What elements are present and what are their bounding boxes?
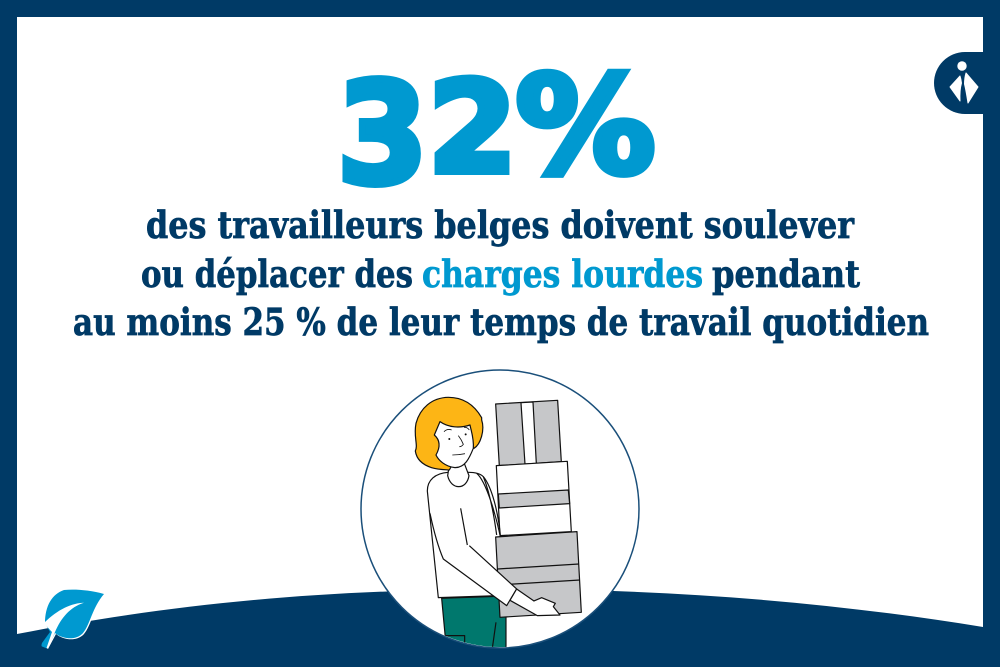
face [434, 422, 473, 468]
statement text: pendant [712, 252, 860, 296]
middle box [496, 461, 571, 536]
neck [448, 464, 469, 487]
big number 32%: 2 [428, 54, 517, 202]
hair [415, 397, 483, 470]
statement text: charges lourdes [422, 252, 703, 296]
statement text [73, 203, 929, 344]
top box [496, 400, 561, 466]
icon: logo tab top right [934, 52, 984, 114]
statement text: ou déplacer des [141, 252, 413, 296]
bottom boxes [496, 532, 581, 617]
hand [510, 589, 560, 616]
statement text: des travailleurs belges doivent soulever [146, 203, 854, 247]
body [427, 472, 507, 598]
icon: leaf bottom left [42, 590, 105, 649]
trousers [442, 596, 506, 652]
big number 32%: 3 [337, 54, 428, 216]
circle background [361, 370, 639, 648]
illustration: person carrying boxes in circle [361, 370, 639, 652]
pocket and trouser seam [445, 622, 496, 648]
arm [493, 572, 516, 605]
big number 32%: % [516, 48, 656, 204]
person and boxes [415, 397, 581, 652]
big number 32% [337, 48, 656, 216]
